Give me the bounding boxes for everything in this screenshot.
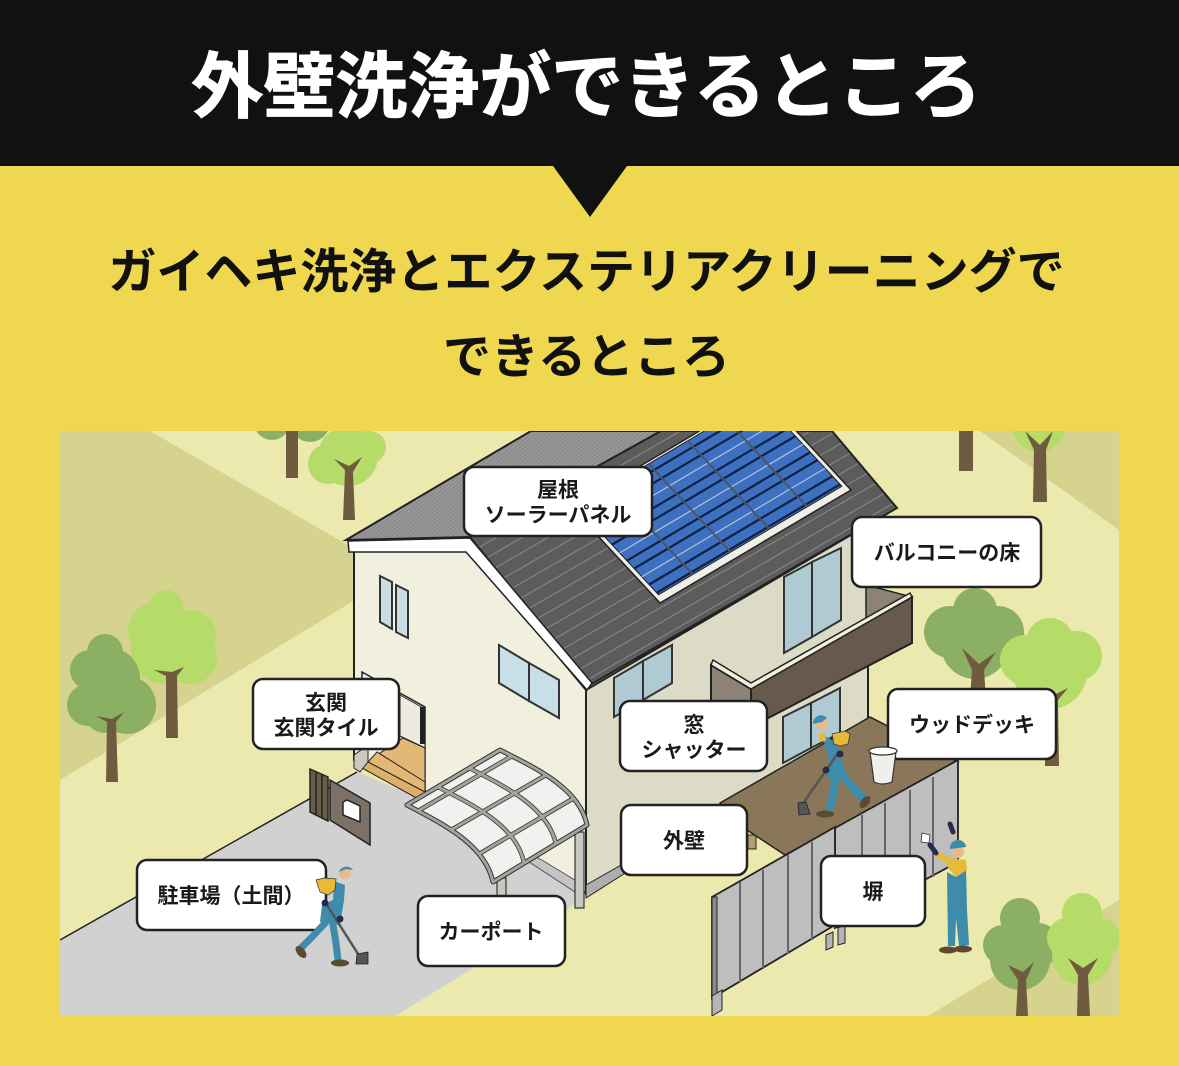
house	[346, 394, 912, 898]
header pointer arrow	[553, 166, 627, 217]
label: entrance: 玄関	[305, 692, 347, 715]
lower window right wall	[614, 645, 672, 717]
house illustration	[60, 431, 1119, 1016]
entrance	[362, 672, 425, 795]
deck window	[783, 688, 840, 763]
trees: left	[67, 590, 217, 782]
label: fence wall	[821, 856, 925, 926]
foundation	[586, 860, 630, 898]
fence	[712, 760, 958, 1016]
trees: right	[924, 588, 1102, 766]
entry wall and slats	[310, 769, 370, 845]
subtitle line 1: ガイヘキ洗浄とエクステリアクリーニングで	[108, 246, 1065, 299]
roof left	[346, 431, 661, 540]
left wall	[354, 551, 586, 893]
worker at fence	[921, 824, 972, 954]
label: roof and solar panel	[464, 467, 652, 536]
label: carport	[418, 896, 565, 966]
label: entrance	[253, 679, 399, 749]
worker on driveway	[293, 867, 368, 966]
header band	[0, 0, 1179, 166]
label: fence wall: 塀	[862, 881, 884, 904]
label: window and shutter: シャッター	[642, 739, 746, 762]
right wall	[586, 525, 868, 893]
label: parking	[137, 860, 326, 930]
label: carport: カーポート	[438, 921, 544, 944]
title: 外壁洗浄ができるところ	[191, 48, 982, 128]
big window left wall	[499, 645, 559, 718]
driveway	[60, 772, 585, 1016]
balcony window	[784, 548, 841, 653]
label: wood deck	[888, 689, 1056, 759]
bucket	[869, 747, 897, 784]
trees: bottom right	[983, 893, 1120, 1016]
label: balcony floor: バルコニーの床	[874, 542, 1020, 565]
label: parking: 駐車場（土間）	[158, 885, 304, 908]
worker on deck	[798, 715, 873, 818]
subtitle line 2: できるところ	[443, 331, 730, 384]
label: roof and solar panel: ソーラーパネル	[485, 504, 631, 527]
balcony	[866, 585, 912, 625]
label: balcony floor	[852, 517, 1041, 587]
label: entrance: 玄関タイル	[274, 717, 378, 740]
small windows	[380, 576, 392, 629]
carport	[407, 750, 587, 910]
label: wood deck: ウッドデッキ	[909, 713, 1035, 737]
label: exterior wall: 外壁	[663, 830, 705, 853]
solar panels	[598, 431, 852, 604]
trees: upper left	[254, 402, 386, 520]
fascia	[348, 538, 592, 690]
label: exterior wall	[621, 805, 747, 875]
roof main	[470, 431, 897, 685]
label: roof and solar panel: 屋根	[537, 479, 579, 502]
label: window and shutter: 窓	[684, 714, 704, 737]
trees: upper right	[959, 398, 1066, 502]
deck	[720, 717, 958, 855]
label: window and shutter	[620, 701, 767, 771]
